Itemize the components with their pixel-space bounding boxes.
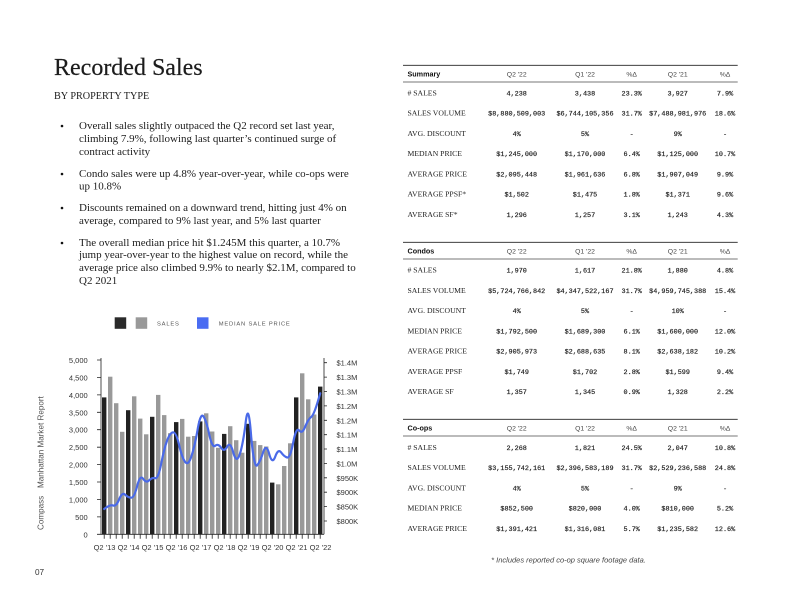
table: summary: 4.3%: [717, 212, 734, 220]
table: summary: MEDIAN PRICE: [408, 149, 462, 158]
chart legend: MEDIAN SALE PRICE: [219, 322, 291, 328]
table: condos: $2,638,182: [657, 349, 698, 357]
side label: Manhattan Market Report: [36, 395, 46, 488]
table: condos: 31.7%: [621, 288, 643, 296]
table: co-ops: MEDIAN PRICE: [408, 504, 462, 513]
table: condos: 1,328: [667, 389, 688, 397]
table: co-ops: $1,316,081: [565, 526, 605, 534]
table: condos: 1,345: [575, 389, 595, 397]
table: summary: 1,296: [506, 212, 527, 220]
x axis labels: Q2 '19: [238, 543, 259, 552]
table: co-ops: -: [723, 486, 727, 494]
table: summary: %Δ: [720, 72, 731, 78]
x axis labels: Q2 '21: [286, 543, 307, 552]
right axis labels: $1.2M: [336, 416, 357, 425]
table: summary: 10.7%: [715, 151, 736, 159]
table: condos: $1,749: [504, 369, 529, 377]
table: summary: Q1 '22: [575, 72, 595, 78]
table: co-ops: %Δ: [720, 426, 731, 432]
table: summary: [403, 65, 738, 220]
table: condos: 10%: [672, 308, 685, 316]
footnote: * Includes reported co-op square footage data.: [491, 556, 646, 564]
table: co-ops: 2,268: [506, 445, 527, 453]
subtitle: BY PROPERTY TYPE: [54, 91, 149, 102]
left axis labels: 2,500: [69, 443, 88, 452]
table: condos: 4.8%: [717, 268, 734, 276]
table: co-ops: 1,821: [575, 445, 595, 453]
table: condos: $1,702: [573, 369, 597, 377]
table: summary: %Δ: [626, 72, 637, 78]
table: condos: 1,880: [667, 268, 688, 276]
side label: [36, 395, 46, 530]
table: summary: $1,907,049: [657, 172, 698, 180]
table: co-ops: AVERAGE PRICE: [408, 524, 467, 533]
table: co-ops: Co-ops: [408, 424, 432, 432]
table: summary: Summary: [408, 70, 440, 78]
table: summary: -: [630, 131, 634, 139]
table: summary: # SALES: [408, 88, 437, 98]
right axis labels: [336, 359, 358, 526]
table: co-ops: Q2 '21: [668, 426, 688, 432]
table: co-ops: 5.2%: [717, 506, 734, 514]
right axis labels: $1.3M: [336, 388, 357, 396]
table: co-ops: $1,235,582: [657, 526, 698, 534]
table: condos: 15.4%: [715, 288, 736, 296]
table: summary: $1,475: [573, 192, 597, 200]
table: condos: %Δ: [720, 248, 731, 256]
table: summary: AVERAGE PRICE: [408, 170, 467, 178]
table: condos: 2.2%: [717, 389, 734, 397]
x axis labels: Q2 '22: [310, 543, 331, 552]
chart legend: [115, 317, 291, 329]
left axis labels: 1,500: [69, 478, 88, 487]
bullet list: Condo sales were up 4.8% year-over-year, while co-ops were: [79, 168, 349, 180]
table: co-ops: Q1 '22: [575, 426, 595, 432]
table: co-ops: $3,155,742,161: [488, 465, 545, 473]
table: summary: 4,238: [506, 90, 527, 98]
x axis labels: Q2 '14: [118, 543, 139, 552]
bar and line chart: [69, 356, 358, 552]
right axis labels: $850K: [336, 503, 358, 512]
chart legend: SALES: [157, 322, 180, 328]
table: condos: $5,724,766,842: [488, 288, 545, 296]
table: co-ops: 24.8%: [715, 465, 736, 473]
left axis labels: 0: [84, 530, 88, 539]
table: summary: $2,095,448: [496, 172, 537, 180]
table: summary: $1,371: [665, 192, 690, 200]
bullet list: The overall median price hit $1.245M this quarter, a 10.7%: [79, 237, 340, 249]
table: condos: 21.8%: [621, 268, 643, 276]
table: summary: 9.9%: [717, 172, 734, 180]
table: condos: %Δ: [626, 248, 637, 256]
table: summary: 1,243: [667, 212, 688, 220]
table: co-ops: SALES VOLUME: [408, 463, 466, 472]
table: co-ops: [403, 419, 738, 534]
table: summary: AVERAGE PPSF*: [408, 190, 466, 199]
left axis labels: 1,000: [69, 495, 88, 504]
table: summary: 9%: [674, 131, 683, 139]
table: condos: SALES VOLUME: [408, 286, 466, 295]
x axis labels: Q2 '20: [262, 543, 283, 552]
table: condos: 6.1%: [624, 328, 641, 336]
right axis labels: $900K: [336, 488, 358, 497]
table: summary: 4%: [513, 131, 522, 139]
table: summary: Q2 '21: [668, 72, 688, 78]
bullet list: average price also climbed 9.9% to nearly $2.1M, compared to: [79, 262, 356, 274]
table: condos: 5%: [581, 308, 590, 316]
table: summary: 23.3%: [621, 90, 643, 98]
table: summary: $1,245,000: [496, 151, 537, 159]
table: co-ops: 5.7%: [624, 526, 641, 534]
table: condos: 2.8%: [624, 369, 641, 377]
table: co-ops: 9%: [674, 486, 683, 494]
table: co-ops: -: [630, 486, 634, 494]
table: co-ops: 12.6%: [715, 526, 736, 534]
table: condos: # SALES: [408, 266, 437, 275]
table: co-ops: 10.8%: [715, 445, 736, 453]
table: condos: $2,688,635: [565, 349, 605, 357]
table: condos: $1,599: [665, 369, 690, 377]
table: condos: Q1 '22: [575, 248, 595, 256]
median price line: [104, 393, 320, 509]
table: condos: Condos: [408, 246, 434, 256]
table: co-ops: $2,529,236,588: [649, 465, 706, 473]
table: summary: 18.6%: [715, 111, 736, 119]
bullet list: Discounts remained on a downward trend, hitting just 4% on: [79, 202, 347, 214]
table: summary: $1,502: [504, 192, 529, 200]
table: condos: 9.4%: [717, 369, 734, 377]
table: condos: 1,357: [506, 389, 527, 397]
left axis labels: 4,000: [69, 391, 88, 400]
table: co-ops: 24.5%: [621, 445, 643, 453]
table: summary: $1,125,000: [657, 151, 698, 159]
left axis labels: 500: [75, 513, 88, 522]
table: co-ops: %Δ: [626, 426, 637, 432]
bullet list: contract activity: [79, 146, 151, 158]
bullet list: Overall sales slightly outpaced the Q2 record set last year,: [79, 120, 335, 132]
table: condos: Q2 '22: [507, 248, 527, 256]
table: summary: 9.6%: [717, 192, 734, 200]
sales bars: [102, 373, 322, 534]
table: co-ops: 4%: [513, 486, 522, 494]
bullet list: jump year-over-year to the highest value on record, while the: [78, 249, 348, 261]
table: summary: 3.1%: [624, 212, 641, 220]
x axis labels: [94, 543, 331, 552]
table: condos: $4,959,745,388: [649, 288, 706, 296]
bullet list: Q2 2021: [79, 275, 117, 287]
table: condos: 4%: [513, 308, 522, 316]
title: Recorded Sales: [54, 55, 203, 81]
table: co-ops: 31.7%: [621, 465, 643, 473]
right axis labels: $1.1M: [336, 445, 357, 454]
left axis labels: 5,000: [69, 356, 88, 365]
bullet list: average, compared to 9% last year, and 5% last quarter: [79, 215, 321, 227]
table: summary: 7.9%: [717, 90, 734, 98]
x axis labels: Q2 '13: [94, 543, 115, 552]
table: condos: 1,617: [575, 268, 595, 276]
x axis labels: Q2 '15: [142, 543, 163, 552]
table: condos: Q2 '21: [668, 248, 688, 256]
table: summary: 3,438: [575, 90, 595, 98]
table: co-ops: 5%: [581, 486, 590, 494]
table: condos: 1,970: [506, 268, 527, 276]
right axis labels: $1.4M: [336, 359, 357, 368]
right axis labels: $1.1M: [336, 431, 357, 440]
right axis labels: $950K: [336, 474, 358, 483]
x axis labels: Q2 '18: [214, 543, 235, 552]
page number: 07: [35, 568, 45, 577]
table: summary: $1,961,636: [565, 172, 605, 180]
table: summary: -: [723, 131, 727, 139]
left axis labels: [69, 356, 88, 539]
table: condos: AVG. DISCOUNT: [408, 306, 466, 315]
table: condos: $1,792,500: [496, 328, 537, 336]
table: summary: 3,927: [667, 90, 688, 98]
right axis labels: $1.0M: [336, 459, 357, 468]
table: condos: 12.0%: [715, 328, 736, 336]
table: summary: 6.8%: [624, 172, 641, 180]
table: summary: $8,880,509,003: [488, 111, 545, 119]
table: condos: -: [630, 308, 634, 316]
table: summary: AVERAGE SF*: [408, 210, 458, 219]
right axis labels: $1.3M: [336, 373, 357, 382]
left axis labels: 3,000: [69, 426, 88, 435]
table: co-ops: 2,047: [667, 445, 688, 453]
table: co-ops: # SALES: [408, 443, 437, 452]
x axis labels: Q2 '16: [166, 543, 187, 552]
table: summary: 31.7%: [621, 111, 643, 119]
table: summary: $7,488,981,976: [649, 111, 706, 119]
side label: Compass: [36, 496, 46, 530]
x axis labels: Q2 '17: [190, 543, 211, 552]
table: condos: $1,600,000: [657, 328, 698, 336]
right axis labels: $800K: [336, 517, 358, 526]
bullet list: climbing 7.9%, following last quarter’s continued surge of: [79, 133, 336, 145]
table: summary: Q2 '22: [507, 72, 527, 78]
table: summary: SALES VOLUME: [408, 109, 466, 118]
table: co-ops: $820,000: [569, 506, 601, 514]
table: co-ops: $1,391,421: [496, 526, 537, 534]
table: condos: 8.1%: [624, 349, 641, 357]
table: summary: 1,257: [575, 212, 595, 220]
table: co-ops: $852,500: [500, 506, 533, 514]
table: summary: 5%: [581, 131, 590, 139]
left axis labels: 3,500: [69, 408, 88, 417]
table: summary: $6,744,105,356: [556, 111, 614, 119]
table: condos: $4,347,522,167: [556, 288, 614, 296]
table: co-ops: $2,396,583,189: [556, 465, 614, 473]
table: condos: AVERAGE PPSF: [408, 367, 462, 376]
bullet list: [61, 120, 356, 287]
table: summary: AVG. DISCOUNT: [408, 129, 466, 138]
table: summary: $1,170,000: [565, 151, 605, 159]
table: summary: 6.4%: [624, 151, 641, 159]
table: condos: AVERAGE PRICE: [408, 347, 467, 356]
table: co-ops: AVG. DISCOUNT: [408, 484, 466, 492]
table: co-ops: 4.0%: [624, 506, 641, 514]
table: condos: 0.9%: [624, 389, 641, 397]
table: condos: MEDIAN PRICE: [408, 326, 462, 336]
left axis labels: 4,500: [69, 373, 88, 382]
table: co-ops: $810,000: [661, 506, 694, 514]
left axis labels: 2,000: [69, 461, 88, 470]
table: condos: $2,905,973: [496, 349, 537, 357]
table: co-ops: Q2 '22: [507, 426, 527, 432]
table: condos: -: [723, 308, 727, 316]
table: condos: $1,689,300: [565, 328, 605, 336]
table: summary: 1.8%: [624, 192, 641, 200]
table: condos: AVERAGE SF: [408, 387, 454, 396]
left axis: [97, 358, 327, 539]
right axis labels: $1.2M: [336, 402, 357, 411]
table: condos: 10.2%: [715, 349, 736, 357]
bullet list: up 10.8%: [79, 180, 121, 192]
table: condos: [403, 242, 738, 397]
